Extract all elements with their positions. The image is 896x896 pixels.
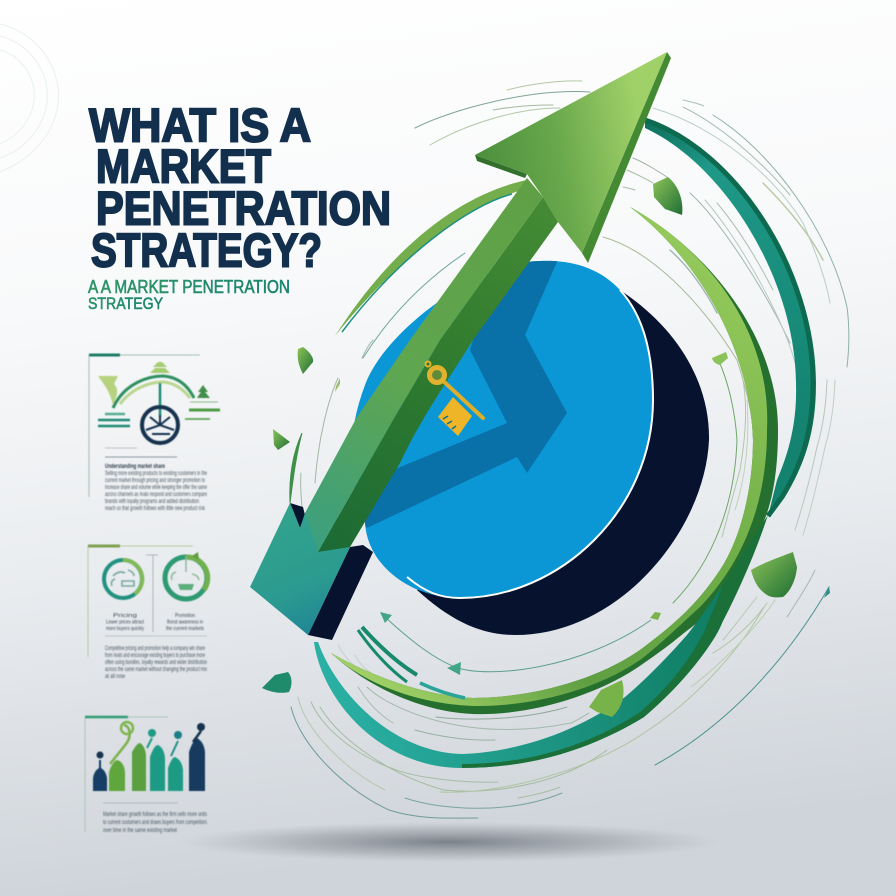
title: PENETRATION [96,182,391,234]
frame accent [85,716,128,718]
band light face [331,207,767,706]
panel: two circular icons and text [88,546,208,680]
arrow head [475,52,667,253]
panel frame [85,717,168,832]
upper left green arc [335,180,527,336]
circle captions: Lower prices attract [106,620,144,626]
band dark edge [331,207,778,714]
panel text: across channels as rivals respond and customers compare [105,492,207,498]
panel frame [88,546,193,657]
divider [146,555,158,632]
leaf stem [290,433,302,503]
panel text: over time in the same existing market [103,828,177,834]
leaf [653,177,682,215]
green spiral band [331,207,778,714]
panel text: to current customers and draws buyers from competitors [103,820,207,826]
panel text: Understanding market share [105,464,165,470]
panel text: current market through pricing and stronger promotion to [105,478,205,484]
arrow head side [582,52,671,263]
circle captions: Promotion [175,613,195,619]
panel text: often using bundles, loyalty rewards and wider distribution [105,660,207,666]
icon: sprouting arch [98,362,220,443]
title: MARKET [96,140,271,192]
panel: growth icon and text [89,355,220,512]
panel text: Competitive pricing and promotion help a company win share [105,646,205,652]
circle captions: the current markets [166,626,204,632]
subtitle: STRATEGY [88,294,163,313]
ground shadow [180,822,720,862]
bar chart [93,722,205,791]
panel text: Selling more existing products to existing customers in the [105,471,207,477]
ring dark outer edge [462,515,768,768]
circle captions [106,613,204,632]
navy disc depth [417,290,709,635]
leaf [262,672,292,693]
inner chevron arrow [365,260,567,528]
panel frame [89,355,200,497]
frame accent [89,354,120,356]
disc highlight [407,290,653,598]
arrow base teal block [250,500,350,635]
panel text: Market share growth follows as the firm sells more units [103,812,207,818]
icon: golden key [426,362,483,436]
leaf [335,378,340,392]
teal ring lower part [314,515,768,768]
decorative faint arcs top left [0,24,58,172]
panel: bar chart and text [85,717,207,834]
subtitle [88,277,290,313]
subtitle: A A MARKET PENETRATION [88,277,290,297]
title: STRATEGY? [91,224,322,276]
panel text: brands with loyalty programs and added distribution [105,499,199,505]
panel text: reach so that growth follows with little new product risk [105,506,206,512]
leaf [589,680,624,717]
leaf [751,552,797,597]
leaf [298,347,313,374]
title [89,98,391,276]
main arrow [250,52,671,640]
circle captions: more buyers quickly [106,626,144,632]
leaf [273,429,290,450]
arrow base notch [290,503,305,528]
blue disc [345,255,653,598]
shaft light face [305,178,543,552]
icon: left circle [104,560,142,598]
panel text: increase share and volume while keeping the offer the same [105,485,207,491]
panel text [105,646,207,680]
icon: right circle [165,552,208,599]
frame accent [88,544,120,548]
panel text: from rivals and encourage existing buyers to purchase more [105,653,205,659]
panel rules [105,447,137,449]
dashes and small arrow line [358,586,830,698]
arrow head back edge [475,155,527,178]
panel rule [103,802,178,804]
shaft dark face [318,197,558,552]
circle captions: Pricing [113,613,137,619]
title: WHAT IS A [89,98,311,152]
panel text: across the same market without changing the product mix [105,667,207,673]
panel text [103,812,207,834]
leaf [712,352,728,365]
leaves [262,177,797,717]
circle captions: Boost awareness in [167,620,203,626]
arrow base navy side [308,545,373,640]
teal ring upper part [645,118,816,516]
thin motion arcs [291,81,849,818]
panel text: at all now [105,674,126,680]
panel rule [105,635,207,637]
panel text [105,464,207,512]
